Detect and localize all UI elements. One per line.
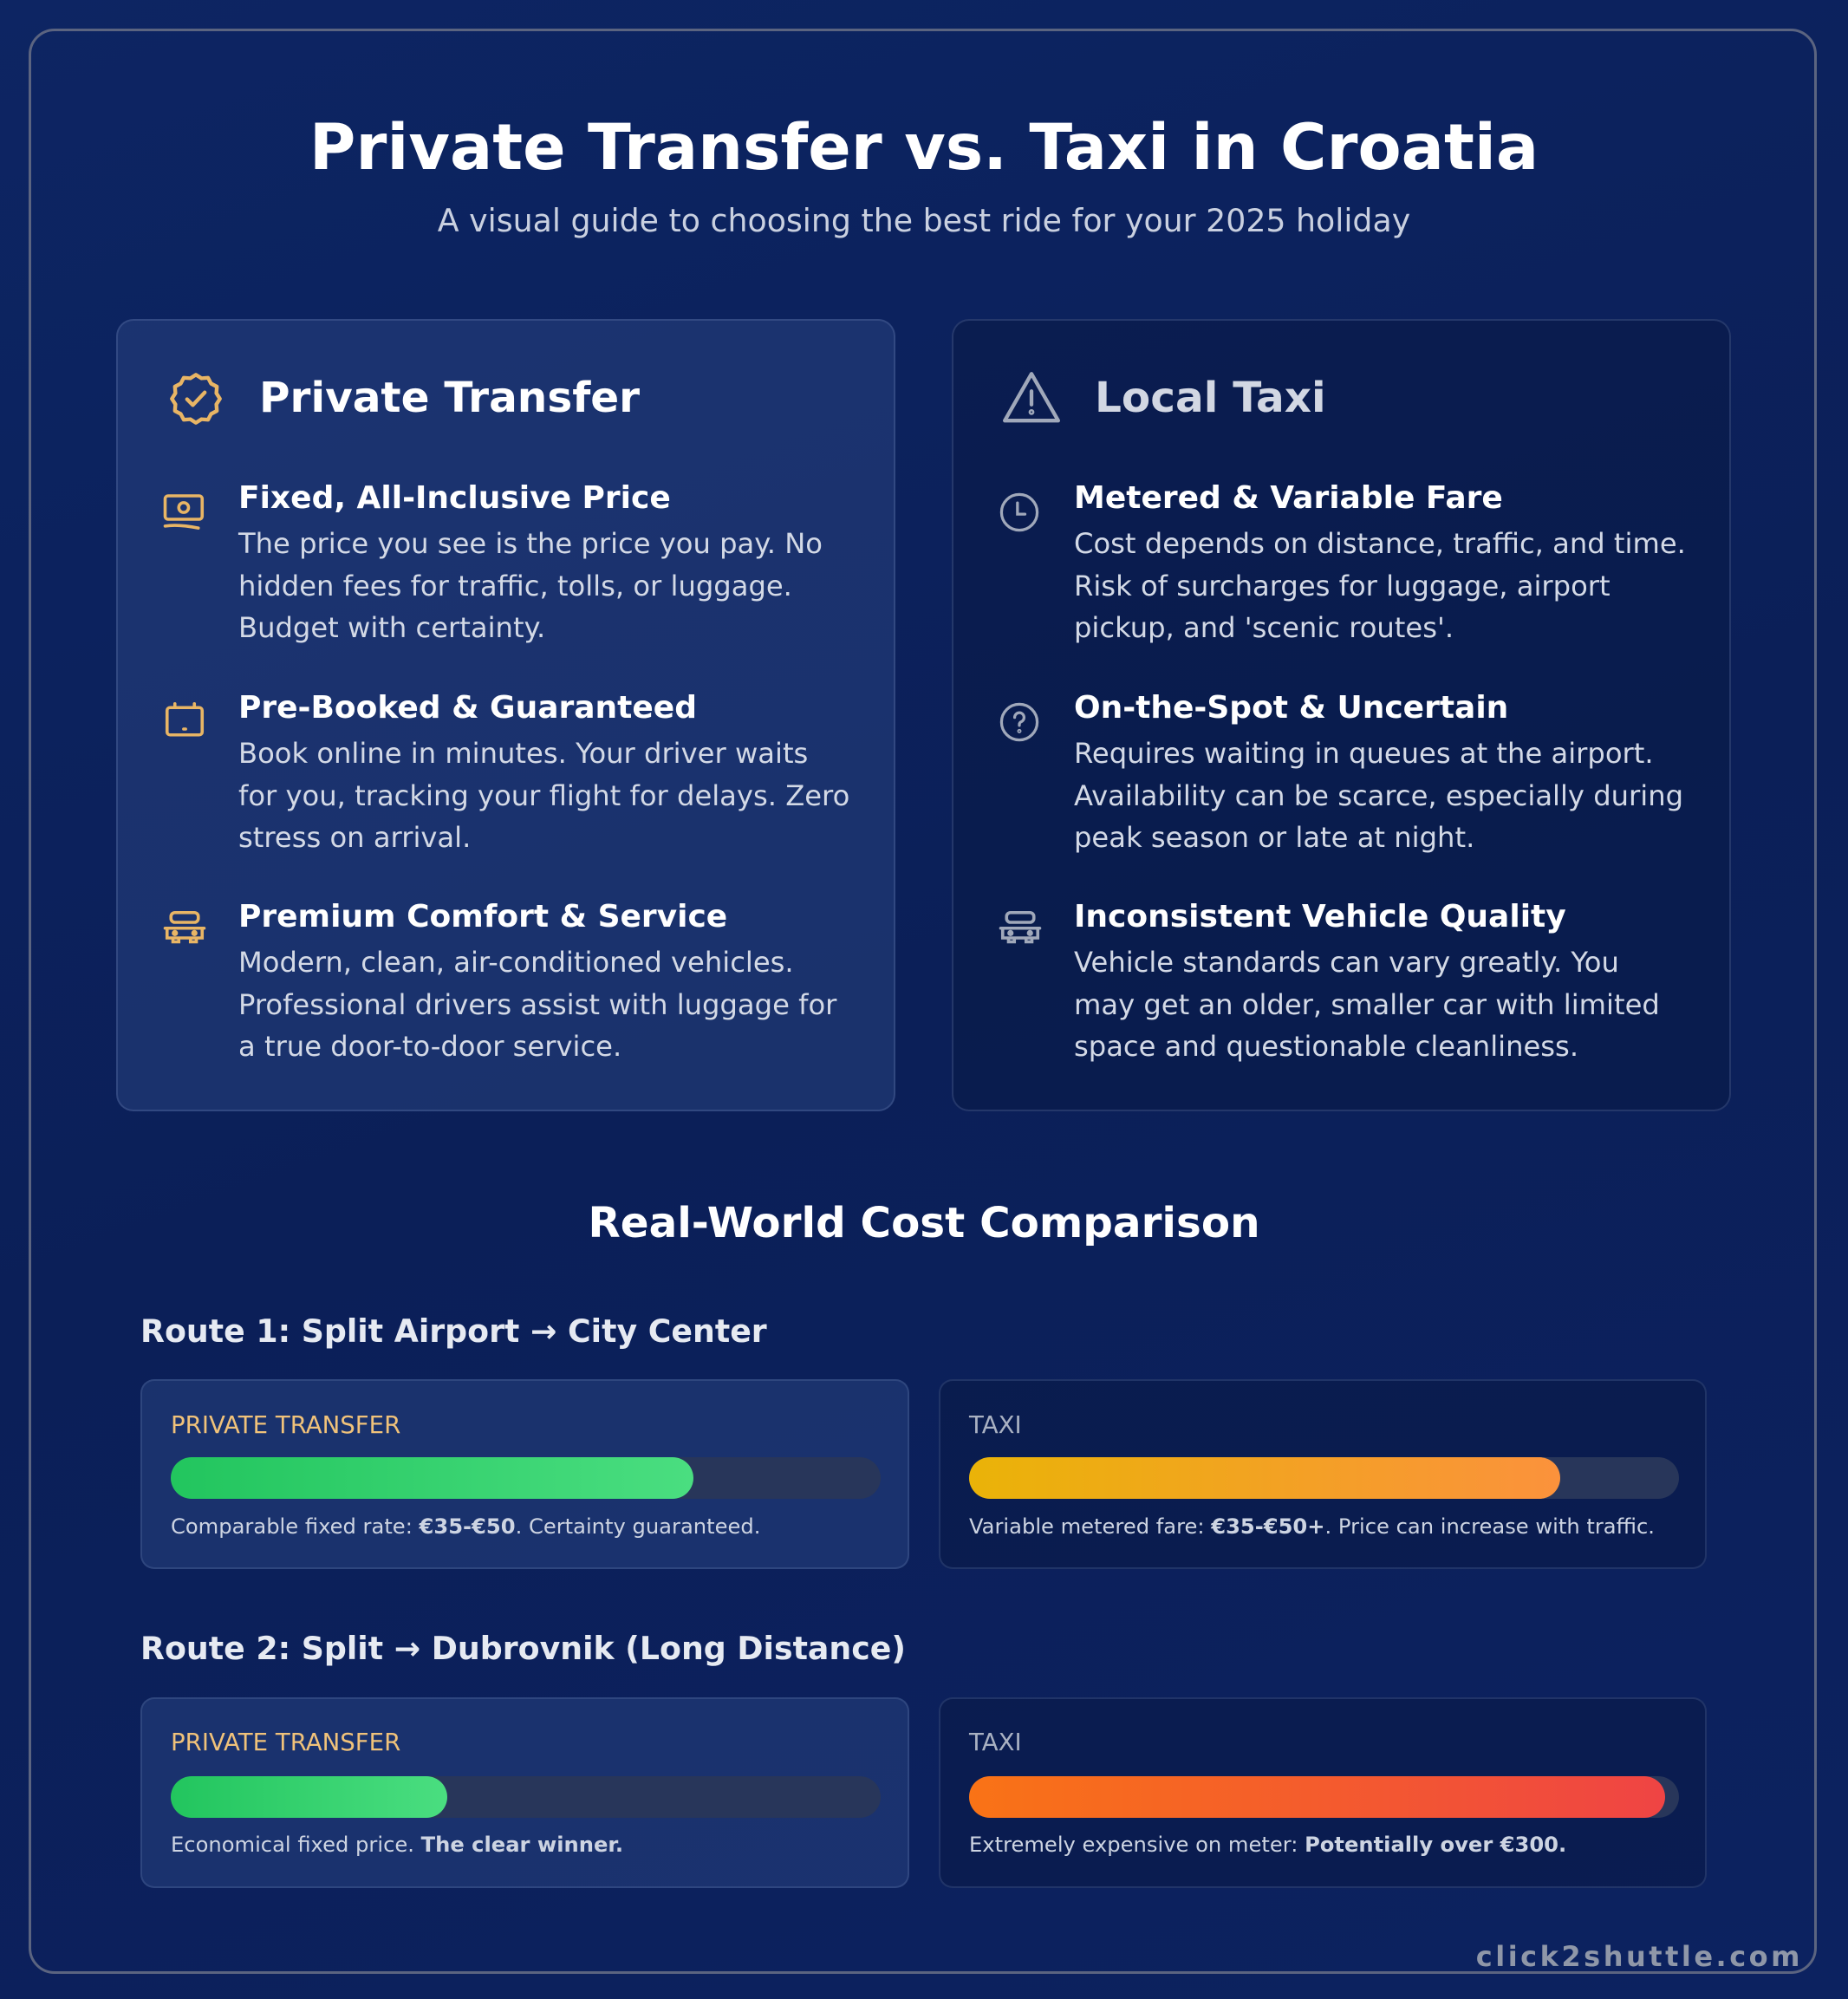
item: pre-booked: Book online in minutes. Your driver waits xyxy=(238,737,808,770)
item: fixed price: hidden fees for traffic, tolls, or luggage. xyxy=(238,569,792,602)
icon: clock xyxy=(1000,492,1038,532)
icon: money xyxy=(163,494,205,530)
cost card: route 2 private: PRIVATE TRANSFER xyxy=(171,1728,400,1756)
cost card: route 2 private: Economical fixed price. The clear winner. xyxy=(171,1833,623,1857)
cost card: route 1 private xyxy=(140,1379,909,1569)
item: metered fare: Metered & Variable Fare xyxy=(1074,480,1503,516)
title: Private Transfer vs. Taxi in Croatia xyxy=(309,111,1539,185)
item: on-the-spot: On-the-Spot & Uncertain xyxy=(1074,690,1508,726)
footer: brand: click2shuttle.com xyxy=(1476,1940,1803,1973)
item: inconsistent quality: Vehicle standards can vary greatly. You xyxy=(1074,946,1619,979)
item: fixed price: The price you see is the price you pay. No xyxy=(238,527,823,560)
item: inconsistent quality: Inconsistent Vehicle Quality xyxy=(1074,899,1566,934)
cost card: route 1 taxi: TAXI xyxy=(969,1410,1022,1439)
item: premium comfort: Modern, clean, air-conditioned vehicles. xyxy=(238,946,794,979)
item: metered fare: Risk of surcharges for luggage, airport xyxy=(1074,569,1610,602)
item: fixed price xyxy=(163,480,823,644)
item: pre-booked: stress on arrival. xyxy=(238,821,471,854)
item: pre-booked: for you, tracking your flight for delays. Zero xyxy=(238,778,849,811)
cost card: route 1 private: Comparable fixed rate: €35-€50. Certainty guaranteed. xyxy=(171,1514,760,1539)
item: inconsistent quality: space and questionable cleanliness. xyxy=(1074,1030,1578,1063)
cost card: route 2 taxi: Extremely expensive on meter: Potentially over €300. xyxy=(969,1833,1566,1857)
item: fixed price: Budget with certainty. xyxy=(238,611,545,644)
panel: private transfer xyxy=(116,319,895,1111)
item: metered fare: pickup, and 'scenic routes'. xyxy=(1074,611,1454,644)
heading: local taxi: Local Taxi xyxy=(1095,374,1326,422)
icon: badge check xyxy=(170,373,222,425)
bar: taxi route 2 xyxy=(969,1776,1679,1818)
item: on-the-spot: peak season or late at night. xyxy=(1074,821,1474,854)
item: pre-booked: Pre-Booked & Guaranteed xyxy=(238,690,697,726)
icon: question xyxy=(1000,702,1038,742)
item: on-the-spot: Requires waiting in queues at the airport. xyxy=(1074,737,1654,770)
item: premium comfort: Premium Comfort & Service xyxy=(238,899,727,934)
bar: taxi route 1 xyxy=(969,1457,1679,1499)
route 2 heading: Route 2: Split → Dubrovnik (Long Distance) xyxy=(140,1630,906,1667)
section heading: Real-World Cost Comparison xyxy=(588,1199,1260,1247)
cost card: route 1 taxi xyxy=(939,1379,1707,1569)
panel: local taxi xyxy=(952,319,1731,1111)
icon: tablet xyxy=(165,702,205,737)
item: premium comfort: a true door-to-door service. xyxy=(238,1030,621,1063)
cost card: route 2 taxi: TAXI xyxy=(969,1728,1022,1756)
item: on-the-spot xyxy=(1000,690,1683,854)
route 1 heading: Route 1: Split Airport → City Center xyxy=(140,1312,767,1350)
item: metered fare: Cost depends on distance, traffic, and time. xyxy=(1074,527,1686,560)
item: inconsistent quality: may get an older, smaller car with limited xyxy=(1074,988,1660,1021)
icon: car xyxy=(999,911,1042,943)
item: inconsistent quality xyxy=(999,899,1660,1063)
heading: private transfer: Private Transfer xyxy=(259,374,640,422)
icon: car xyxy=(163,911,206,943)
bar: private route 2 xyxy=(171,1776,881,1818)
item: pre-booked xyxy=(165,690,849,854)
item: fixed price: Fixed, All-Inclusive Price xyxy=(238,480,671,516)
item: metered fare xyxy=(1000,480,1686,644)
cost card: route 2 private xyxy=(140,1697,909,1888)
bar: private route 1 xyxy=(171,1457,881,1499)
cost card: route 1 taxi: Variable metered fare: €35-€50+. Price can increase with traffic. xyxy=(969,1514,1655,1539)
icon: warning xyxy=(1003,372,1060,423)
cost card: route 1 private: PRIVATE TRANSFER xyxy=(171,1410,400,1439)
item: premium comfort xyxy=(163,899,837,1063)
subtitle: A visual guide to choosing the best ride for your 2025 holiday xyxy=(438,202,1410,239)
item: on-the-spot: Availability can be scarce, especially during xyxy=(1074,778,1683,811)
item: premium comfort: Professional drivers assist with luggage for xyxy=(238,988,836,1021)
cost card: route 2 taxi xyxy=(939,1697,1707,1888)
